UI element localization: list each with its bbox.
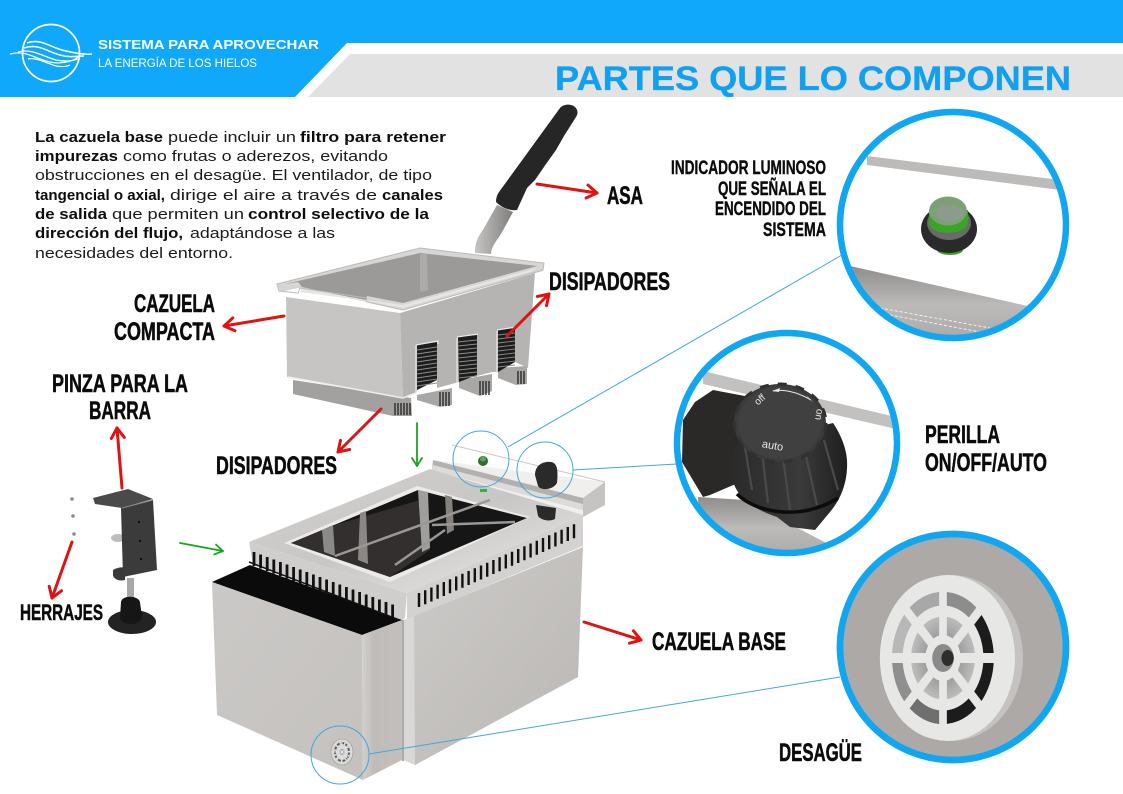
brand name: SISTEMA PARA APROVECHAR xyxy=(98,37,320,52)
clamp (pinza para la barra) xyxy=(93,489,157,634)
vent strip right xyxy=(407,515,583,619)
arrow: cazuela base xyxy=(584,622,641,640)
description text block: dirige el aire a través de xyxy=(170,187,377,204)
fryer unit (cazuela base) xyxy=(212,445,605,780)
fryer opening xyxy=(284,486,530,582)
header banner xyxy=(0,0,1123,97)
drawer interior xyxy=(212,565,402,635)
label: cazuela compacta xyxy=(114,290,215,346)
label: perilla: PERILLA xyxy=(925,421,1000,449)
fryer right body xyxy=(404,547,583,765)
description text block: control selectivo de la xyxy=(248,206,430,223)
bottom plate and feet xyxy=(293,380,412,416)
heat sink vents xyxy=(417,328,515,390)
description text block: impurezas xyxy=(35,148,118,165)
description text block: adaptándose a las xyxy=(190,225,335,242)
leader lines and locator circles xyxy=(311,255,842,784)
logo xyxy=(10,24,92,82)
description text block: como frutas o aderezos, evitando xyxy=(123,148,388,165)
label: asa: ASA xyxy=(607,182,643,210)
description text block: de salida xyxy=(35,206,108,223)
arrow: assembly clamp xyxy=(180,543,223,551)
description text block: dirección del flujo, xyxy=(35,225,183,242)
description text block: La cazuela base xyxy=(35,129,163,146)
detail circle: drain xyxy=(840,534,1066,760)
label: indicador luminoso: ENCENDIDO DEL xyxy=(715,198,826,220)
label: indicador luminoso: SISTEMA xyxy=(763,219,826,241)
arrow: disipadores inferior xyxy=(338,409,381,452)
indicator button xyxy=(921,196,977,255)
arrow: disipadores superior xyxy=(507,294,549,336)
label: pinza para la barra: PINZA PARA LA xyxy=(52,370,188,398)
basket (cazuela compacta) xyxy=(277,105,578,416)
knob marks xyxy=(753,388,825,454)
knob marks: auto xyxy=(761,438,784,454)
small drain grille xyxy=(331,739,353,765)
description text block: necesidades del entorno. xyxy=(35,245,233,262)
label: indicador luminoso: QUE SEÑALA EL xyxy=(718,177,826,200)
description text block: tangencial o axial, xyxy=(35,187,165,204)
label: disipadores superior: DISIPADORES xyxy=(549,268,670,296)
basket left face xyxy=(286,297,403,398)
detail circle: knob xyxy=(675,330,900,560)
knob marks: off xyxy=(753,392,768,408)
title: PARTES QUE LO COMPONEN xyxy=(555,60,1071,98)
basket handle xyxy=(475,105,578,254)
label: cazuela compacta: COMPACTA xyxy=(114,318,215,346)
screws (herrajes) xyxy=(70,497,76,536)
description text block: que permiten un xyxy=(112,206,244,223)
label: indicador luminoso xyxy=(671,157,826,241)
label: cazuela base: CAZUELA BASE xyxy=(652,628,786,656)
label: desagüe: DESAGÜE xyxy=(779,738,862,767)
drain grille xyxy=(880,575,1023,741)
vent strip left xyxy=(249,542,407,621)
knob marks: on xyxy=(812,408,825,421)
label: cazuela compacta: CAZUELA xyxy=(134,290,215,318)
basket right face xyxy=(400,273,535,398)
basket rim and interior xyxy=(277,248,544,310)
control panel xyxy=(432,445,605,517)
label: pinza para la barra xyxy=(52,370,188,425)
description text block: obstrucciones en el desagüe. El ventilador, de tipo xyxy=(35,167,432,184)
arrow: cazuela compacta xyxy=(224,316,284,326)
arrow: asa xyxy=(537,184,597,193)
detail circle: indicator light xyxy=(835,105,1071,345)
drawer front and side xyxy=(212,582,363,780)
knob on panel xyxy=(535,462,557,520)
label: perilla xyxy=(925,421,1047,477)
label: perilla: ON/OFF/AUTO xyxy=(925,449,1047,477)
description text block: filtro para retener xyxy=(300,129,446,146)
brand tagline: LA ENERGÍA DE LOS HIELOS xyxy=(98,57,257,70)
knob body xyxy=(732,384,847,530)
description text block: puede incluir un xyxy=(168,129,296,146)
description text block: canales xyxy=(382,187,443,204)
label: pinza para la barra: BARRA xyxy=(89,397,151,425)
label: herrajes: HERRAJES xyxy=(20,600,103,625)
label: disipadores inferior: DISIPADORES xyxy=(216,452,337,480)
description text block xyxy=(35,129,446,262)
fryer top deck xyxy=(249,469,583,593)
indicator light on panel xyxy=(478,456,488,492)
arrow: assembly basket xyxy=(416,423,418,466)
arrow: pinza xyxy=(117,428,122,488)
arrow: herrajes xyxy=(52,542,72,598)
label: indicador luminoso: INDICADOR LUMINOSO xyxy=(671,157,826,179)
